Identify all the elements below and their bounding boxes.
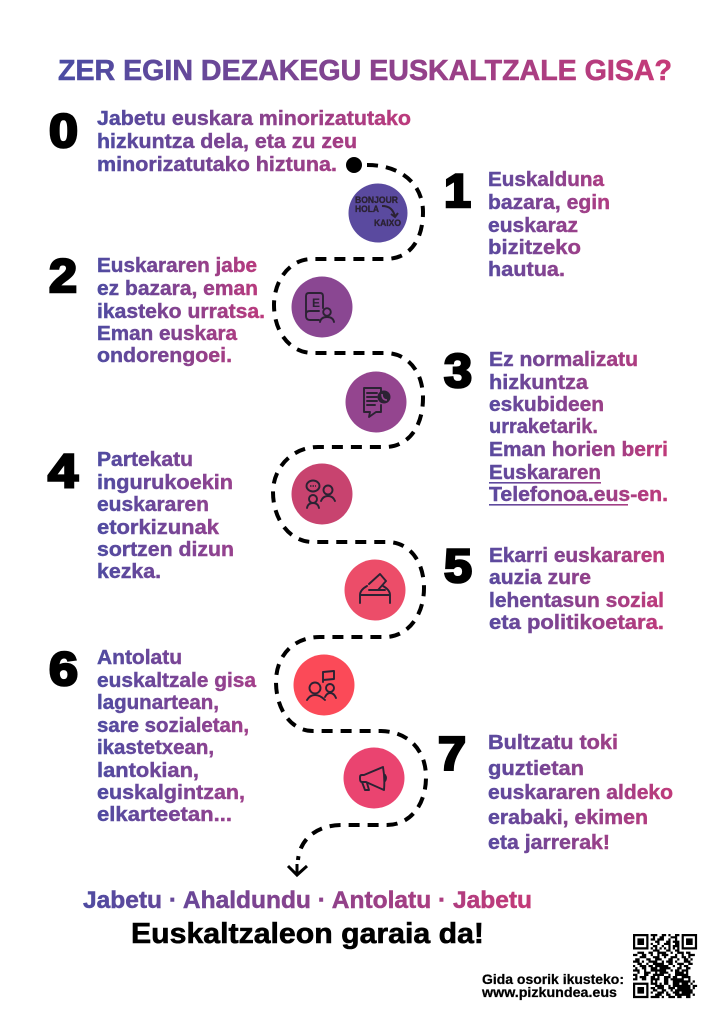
step 6 text — [97, 646, 257, 826]
dashed path with start dot and arrow — [273, 157, 426, 875]
step 2 text: Euskararen jabe — [97, 254, 257, 277]
step 6 text: sare sozialetan, — [97, 714, 249, 737]
icon: book and person circle: E — [312, 296, 320, 310]
step 6 text: euskalgintzan, — [97, 781, 245, 804]
step 7 text: eta jarrerak! — [488, 831, 610, 854]
step 1 text: hautua. — [488, 258, 565, 281]
step 3 text: urraketarik. — [489, 415, 598, 438]
closing headline: Euskaltzaleon garaia da! — [131, 918, 484, 950]
step 0 text: hizkuntza dela, eta zu zeu — [97, 130, 357, 153]
icon: book and person circle — [292, 276, 352, 338]
step 0 text — [97, 107, 411, 176]
step 6 text: lagunartean, — [97, 691, 219, 714]
step 3 number: 3 — [444, 344, 472, 397]
step 1 text: bazara, egin — [488, 191, 610, 214]
step 4 text: etorkizunak — [97, 516, 220, 539]
icon: languages circle: BONJOUR — [355, 195, 398, 205]
step 4 text: euskararen — [97, 493, 209, 516]
step 3 text: Eman horien berri — [489, 438, 668, 461]
step 1 text: euskaraz — [488, 214, 578, 237]
step 0 text: Jabetu euskara minorizatutako — [97, 107, 411, 130]
website note: Gida osorik ikusteko: — [482, 972, 624, 987]
step 5 number: 5 — [444, 539, 472, 592]
step 1 number: 1 — [444, 164, 471, 217]
icon: ballot box circle — [344, 560, 406, 620]
step 7 text: euskararen aldeko — [488, 781, 673, 804]
step 1 text: bizitzeko — [488, 236, 581, 259]
step 2 text: ikasteko urratsa. — [97, 300, 265, 323]
step 7 text: Bultzatu toki — [488, 731, 618, 754]
step 4 text — [97, 448, 234, 583]
step 6 text: lantokian, — [97, 759, 199, 782]
step 2 text: ez bazara, eman — [97, 277, 258, 300]
step 4 text: ingurukoekin — [97, 471, 233, 494]
step 0 text: minorizatutako hiztuna. — [97, 153, 337, 176]
step 7 text: guztietan — [488, 757, 584, 780]
step 5 text — [489, 544, 665, 634]
step 5 text: eta politikoetara. — [489, 611, 664, 634]
title: ZER EGIN DEZAKEGU EUSKALTZALE GISA? — [58, 55, 672, 87]
step 1 text — [488, 168, 610, 281]
website note — [481, 972, 624, 1000]
step 6 text: euskaltzale gisa — [97, 669, 257, 692]
website note: www.pizkundea.eus — [481, 985, 617, 1000]
icon: languages circle: KAIXO — [374, 218, 401, 228]
step 6 number: 6 — [49, 642, 78, 695]
icon: languages circle — [348, 184, 408, 242]
step 2 text — [97, 254, 265, 367]
step 6 text: Antolatu — [97, 646, 182, 669]
icon: people talking circle — [292, 464, 352, 524]
step 4 number: 4 — [48, 444, 78, 497]
step 2 text: Eman euskara — [97, 322, 238, 345]
step 7 number: 7 — [438, 727, 466, 780]
step 7 text — [488, 731, 673, 854]
step 3 text: hizkuntza — [489, 371, 589, 394]
icon: megaphone circle — [344, 748, 404, 808]
step 5 text: lehentasun sozial — [489, 589, 664, 612]
step 3 text — [489, 348, 668, 506]
QR code — [633, 934, 697, 998]
slogan line: Jabetu · Ahaldundu · Antolatu · Jabetu — [83, 887, 532, 914]
step 4 text: Partekatu — [97, 448, 193, 471]
icon: people with flag circle — [294, 654, 354, 716]
step 6 text: elkarteetan... — [97, 803, 232, 826]
step 5 text: auzia zure — [489, 566, 591, 589]
step 5 text: Ekarri euskararen — [489, 544, 665, 567]
step 7 text: erabaki, ekimen — [488, 806, 648, 829]
step 3 text: eskubideen — [489, 393, 604, 416]
icon: document and phone circle — [346, 372, 406, 432]
step 3 text: Telefonoa.eus-en. — [489, 483, 668, 506]
step 1 text: Euskalduna — [488, 168, 605, 191]
step 3 text: Euskararen — [489, 461, 601, 484]
step 2 number: 2 — [49, 249, 77, 302]
step 4 text: kezka. — [97, 560, 161, 583]
step 0 number: 0 — [49, 104, 78, 157]
step 3 text: Ez normalizatu — [489, 348, 638, 371]
step 6 text: ikastetxean, — [97, 736, 214, 759]
icon: languages circle: HOLA — [355, 204, 379, 214]
step 2 text: ondorengoei. — [97, 344, 232, 367]
step 4 text: sortzen dizun — [97, 538, 234, 561]
